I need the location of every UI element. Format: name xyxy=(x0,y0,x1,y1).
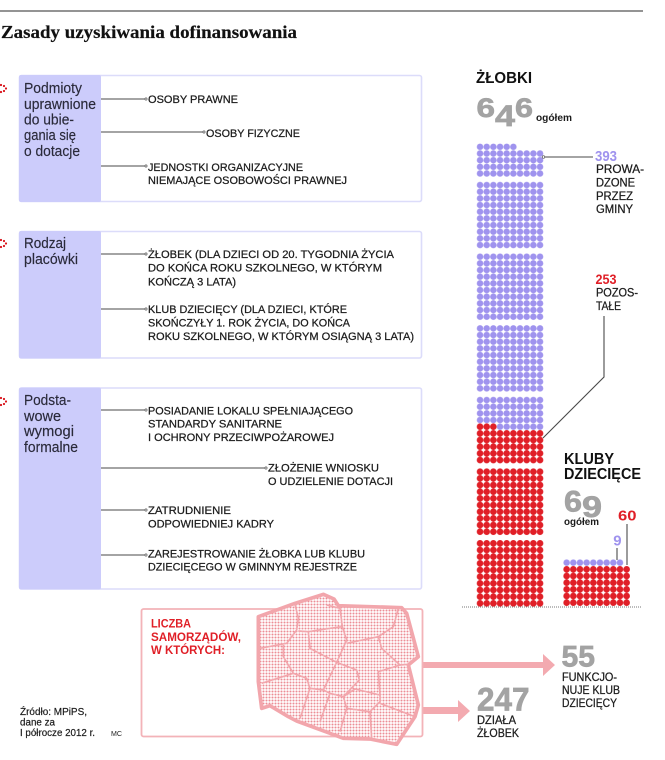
panel heading xyxy=(24,236,78,268)
number: 69: 6 xyxy=(564,486,582,519)
icon: red dots marker xyxy=(0,84,7,93)
item: klub dziecięcy: SKOŃCZYŁY 1. ROK ŻYCIA, DO KOŃCA xyxy=(148,316,351,330)
number: 646: 6 xyxy=(476,93,495,123)
callout: 9: 9 xyxy=(613,532,622,550)
callout: 253 pozostałe: POZOS- xyxy=(596,288,638,300)
callout: 393 prowadzone przez gminy: GMINY xyxy=(596,204,633,216)
label: liczba samorządów: W KTÓRYCH: xyxy=(151,644,225,657)
callout: 60: 60 xyxy=(618,508,636,525)
panel heading: Podsta- xyxy=(24,393,71,409)
callout: 393 prowadzone przez gminy: 393 xyxy=(595,149,617,165)
item: jednostki organizacyjne: JEDNOSTKI ORGANIZACYJNE xyxy=(148,162,303,174)
heading: kluby dziecięce: KLUBY xyxy=(564,451,615,468)
item: kadra xyxy=(101,505,275,530)
item: klub dziecięcy: KLUB DZIECIĘCY (DLA DZIECI, KTÓRE xyxy=(148,303,347,316)
source note: Źródło: MPiPS, xyxy=(20,705,87,718)
stat: 247 działa żłobek: ŻŁOBEK xyxy=(477,727,519,740)
item: osoby prawne xyxy=(101,94,238,106)
stat: 247 działa żłobek xyxy=(477,682,530,740)
panel heading: Podmioty xyxy=(24,81,83,97)
item: lokal: POSIADANIE LOKALU SPEŁNIAJĄCEGO xyxy=(148,405,353,417)
number: 646: 6 xyxy=(515,93,533,123)
heading: żłobki: ŻŁOBKI xyxy=(476,70,532,87)
map: Polska xyxy=(258,594,418,744)
item: klub dziecięcy xyxy=(101,303,414,343)
panel: rodzaj placówki xyxy=(0,231,422,358)
stat: 247 działa żłobek: DZIAŁA xyxy=(477,715,516,727)
item: rejestr: DZIECIĘCEGO W GMINNYM REJESTRZE xyxy=(148,562,357,574)
item: żłobek: ŻŁOBEK (DLA DZIECI OD 20. TYGODNIA ŻYCIA xyxy=(148,248,395,261)
callout: 60 xyxy=(618,508,636,565)
item: żłobek: KOŃCZĄ 3 LATA) xyxy=(148,276,236,289)
panel heading xyxy=(23,393,78,456)
icon: red dots marker xyxy=(0,239,7,248)
source note: I półrocze 2012 r. xyxy=(20,728,95,739)
chart: kluby unit dots xyxy=(563,559,630,606)
title: Zasady uzyskiwania dofinansowania xyxy=(1,22,297,42)
item: klub dziecięcy: ROKU SZKOLNEGO, W KTÓRYM OSIĄGNĄ 3 LATA) xyxy=(148,330,414,343)
callout: 253 pozostałe xyxy=(543,271,638,438)
stat: 55 funkcjonuje klub dziecięcy: DZIECIĘCY xyxy=(562,698,617,710)
arrow: to 55 xyxy=(423,654,555,676)
item: osoby fizyczne: OSOBY FIZYCZNE xyxy=(206,128,300,140)
label: liczba samorządów xyxy=(151,619,241,657)
source note xyxy=(20,705,95,739)
label: liczba samorządów: LICZBA xyxy=(151,619,191,631)
number: 646 xyxy=(476,93,533,133)
item: żłobek xyxy=(101,248,395,289)
panel: podstawowe wymogi formalne xyxy=(0,388,422,590)
heading: kluby dziecięce: DZIECIĘCE xyxy=(564,466,641,483)
item: lokal: STANDARDY SANITARNE xyxy=(148,419,282,431)
label: liczba samorządów: SAMORZĄDÓW, xyxy=(151,631,241,644)
label: ogółem: ogółem xyxy=(536,112,572,124)
callout: 393 prowadzone przez gminy: DZONE xyxy=(596,178,635,190)
item: osoby prawne: OSOBY PRAWNE xyxy=(148,94,238,106)
item: kadra: ZATRUDNIENIE xyxy=(148,505,231,517)
callout: 9 xyxy=(613,532,622,560)
number: 69: 9 xyxy=(582,491,602,524)
stat: 55 funkcjonuje klub dziecięcy xyxy=(562,641,620,710)
stat: 55 funkcjonuje klub dziecięcy: 55 xyxy=(562,641,595,674)
item: wniosek: ZŁOŻENIE WNIOSKU xyxy=(268,462,379,475)
author initials: MC xyxy=(111,731,122,738)
item: wniosek xyxy=(101,462,393,488)
heading: kluby dziecięce xyxy=(564,451,641,483)
item: żłobek: DO KOŃCA ROKU SZKOLNEGO, W KTÓRYM xyxy=(148,262,382,275)
item: jednostki organizacyjne: NIEMAJĄCE OSOBOWOŚCI PRAWNEJ xyxy=(148,174,347,187)
panel heading: gania się xyxy=(24,128,76,144)
panel heading: Rodzaj xyxy=(24,236,66,252)
panel heading: do ubie- xyxy=(24,112,74,128)
callout: 253 pozostałe: TAŁE xyxy=(596,301,621,313)
item: kadra: ODPOWIEDNIEJ KADRY xyxy=(148,518,275,530)
item: wniosek: O UDZIELENIE DOTACJI xyxy=(268,476,393,488)
item: rejestr: ZAREJESTROWANIE ŻŁOBKA LUB KLUBU xyxy=(148,547,365,560)
panel: liczba samorządów xyxy=(142,609,422,736)
stat: 55 funkcjonuje klub dziecięcy: NUJE KLUB xyxy=(562,685,620,697)
stat: 55 funkcjonuje klub dziecięcy: FUNKCJO- xyxy=(562,672,617,684)
item: jednostki organizacyjne xyxy=(101,162,347,187)
panel heading: wowe xyxy=(23,409,61,425)
arrow: to 247 xyxy=(423,700,470,722)
label: ogółem: ogółem xyxy=(564,516,599,528)
chart: żłobki unit dots xyxy=(477,144,543,607)
panel: podmioty uprawnione xyxy=(0,75,422,202)
panel heading: formalne xyxy=(24,440,78,456)
callout: 393 prowadzone przez gminy: PROWA- xyxy=(596,164,644,176)
number: 646: 4 xyxy=(495,100,515,133)
callout: 393 prowadzone przez gminy xyxy=(542,149,644,216)
callout: 253 pozostałe: 253 xyxy=(596,271,617,287)
item: rejestr xyxy=(101,547,365,574)
stat: 247 działa żłobek: 247 xyxy=(477,682,530,718)
item: lokal: I OCHRONY PRZECIWPOŻAROWEJ xyxy=(148,431,334,444)
item: lokal xyxy=(101,405,353,444)
callout: 393 prowadzone przez gminy: PRZEZ xyxy=(596,191,633,203)
panel heading xyxy=(24,81,96,160)
panel heading: uprawnione xyxy=(24,97,96,113)
panel heading: wymogi xyxy=(23,424,74,440)
number: 69 xyxy=(564,486,602,524)
icon: red dots marker xyxy=(0,397,7,406)
panel heading: o dotacje xyxy=(24,144,80,160)
source note: dane za xyxy=(20,718,55,728)
panel heading: placówki xyxy=(24,252,78,268)
